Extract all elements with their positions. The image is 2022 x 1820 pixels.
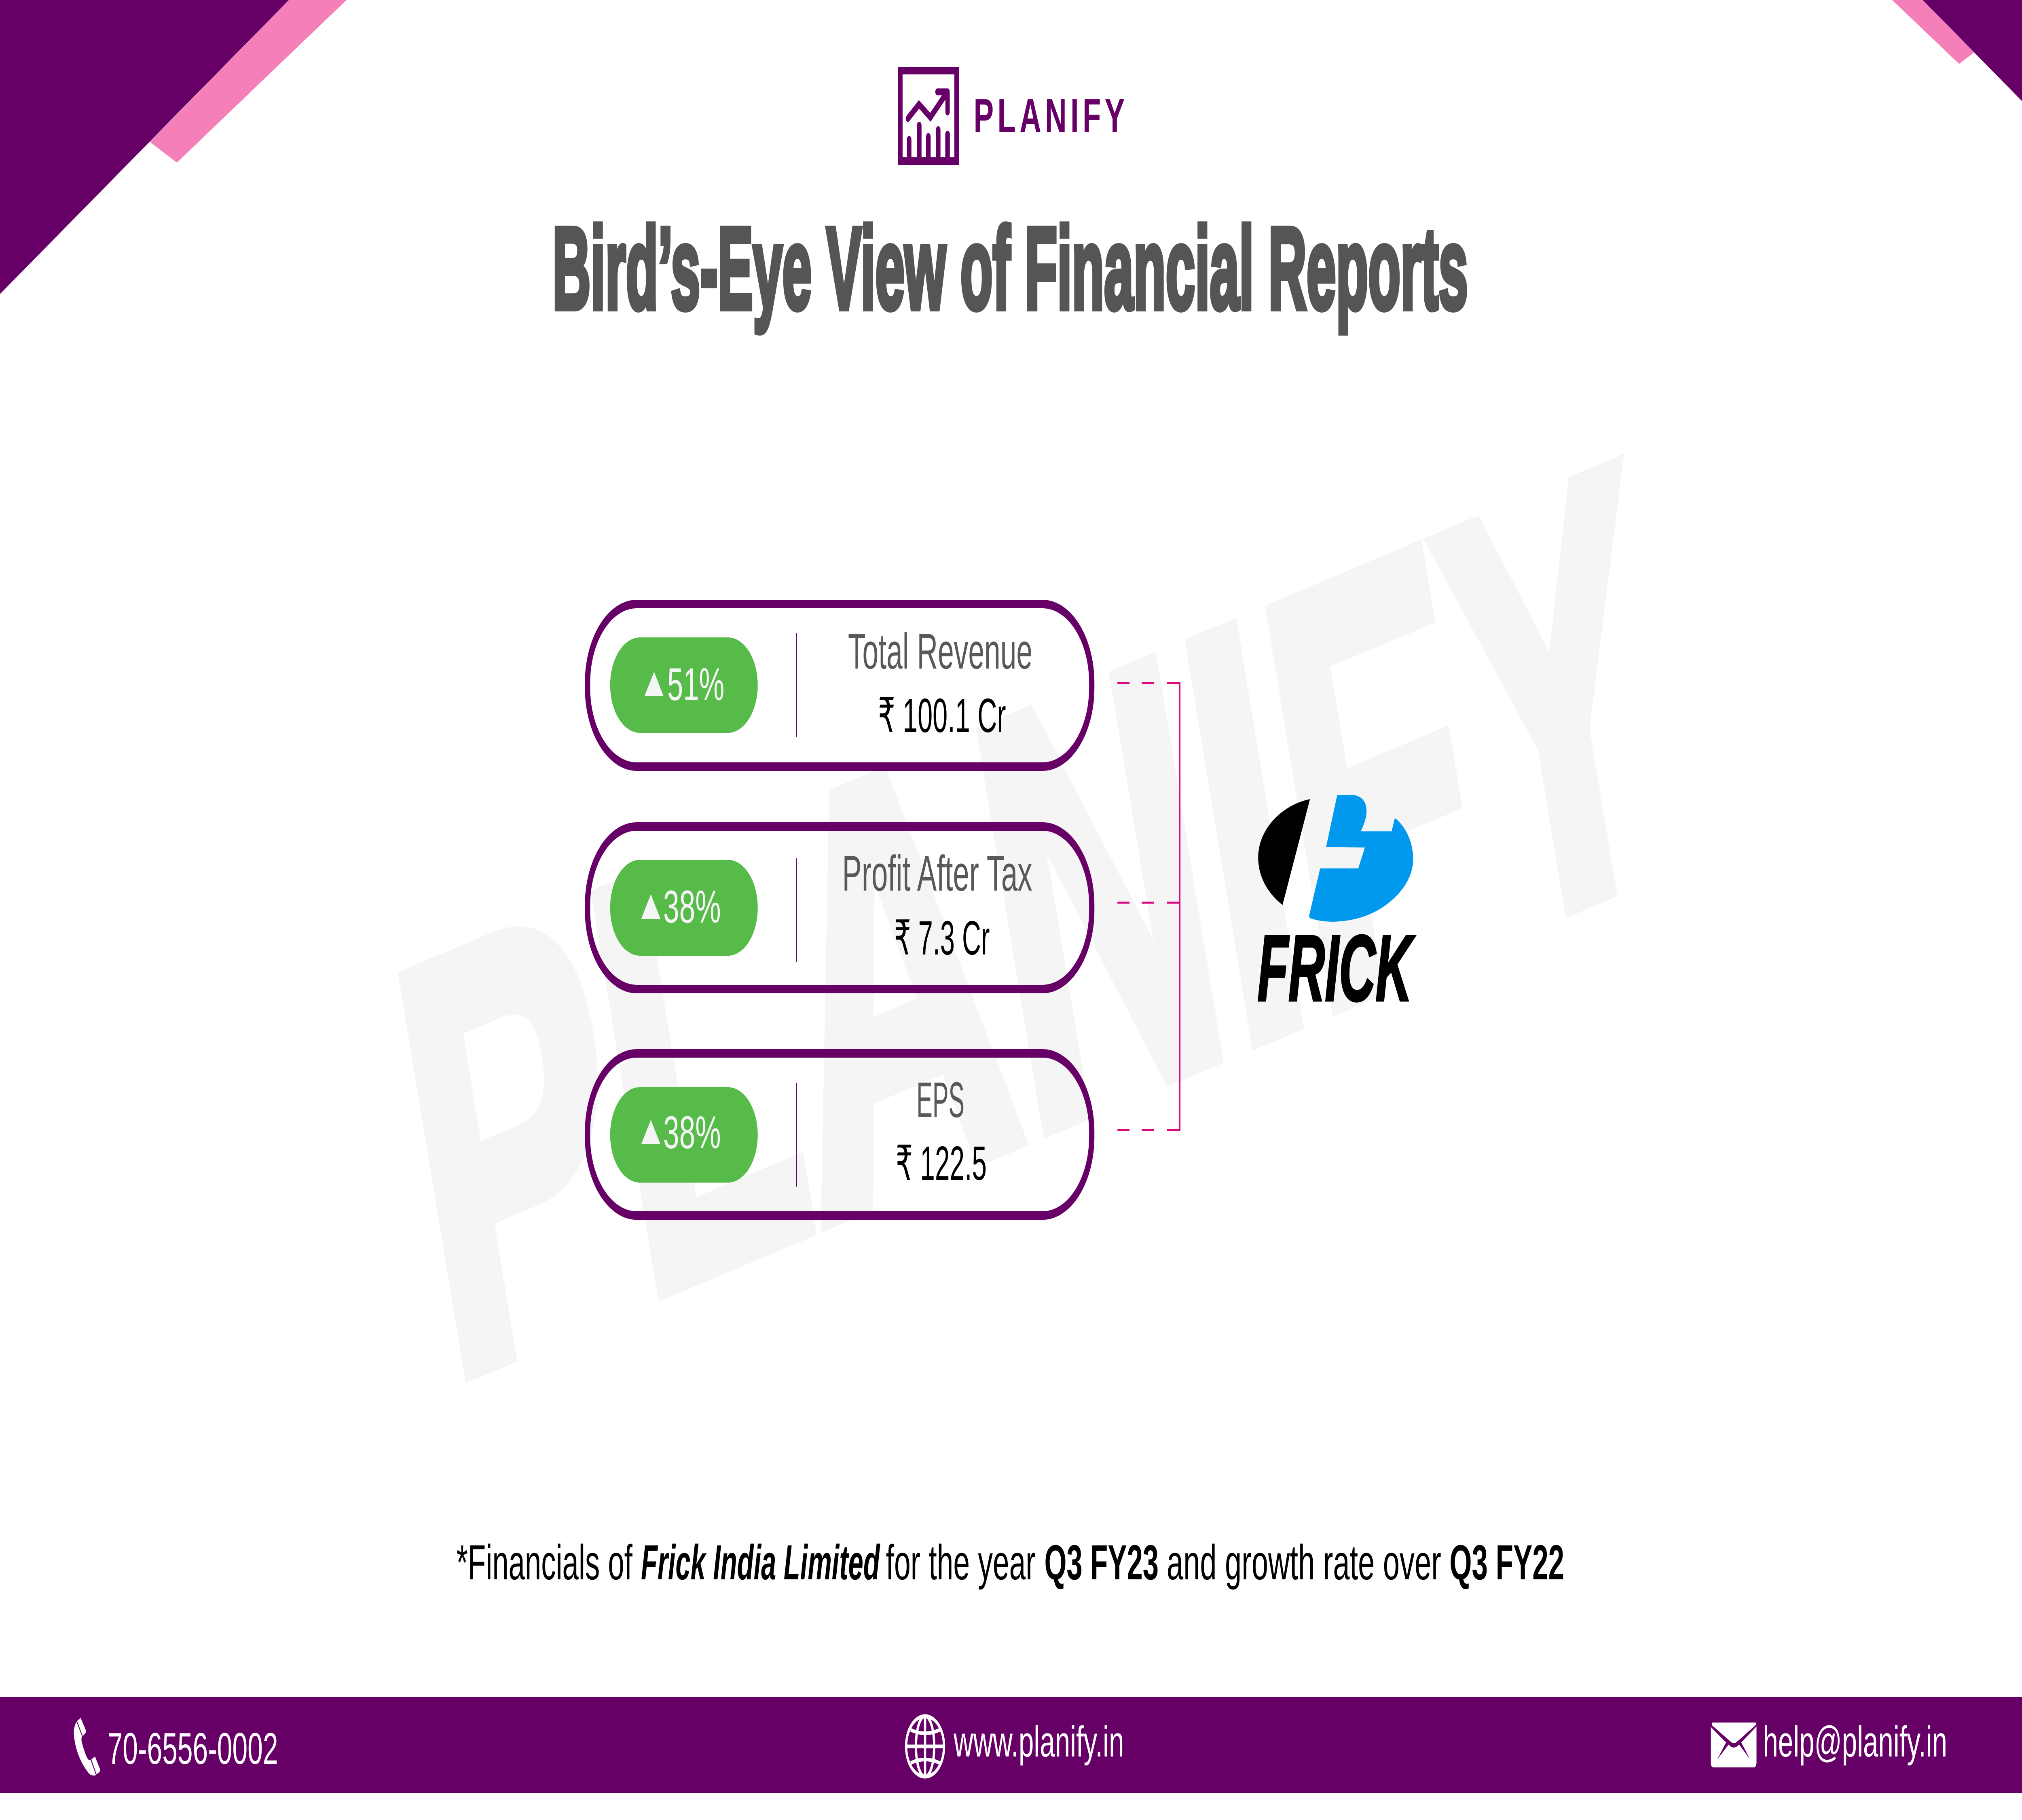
label: Profit After Tax <box>842 846 1032 902</box>
footnote: and growth rate over <box>1167 1535 1441 1590</box>
growth badge: 51%: 51% <box>667 659 724 710</box>
brand logo <box>898 67 1125 165</box>
footnote: *Financials of <box>457 1535 632 1590</box>
growth badge: 38%: 38% <box>663 1107 721 1158</box>
growth badge: 38%: 38% <box>663 881 721 933</box>
label: Total Revenue <box>848 624 1032 679</box>
phone number: 70-6556-0002 <box>108 1724 278 1773</box>
title: Bird’s-Eye View of Financial Reports <box>552 203 1468 334</box>
label: EPS <box>916 1072 964 1128</box>
footnote: Q3 FY23 <box>1044 1535 1159 1590</box>
footnote <box>457 1535 1564 1590</box>
icon: Frick emblem <box>1258 795 1413 922</box>
company name: FRICK <box>1257 916 1415 1021</box>
icon: chart logo <box>898 67 959 165</box>
website: www.planify.in <box>953 1717 1124 1766</box>
top-left corner decoration <box>0 0 347 294</box>
growth badge: 51% <box>610 637 758 733</box>
growth badge: 38% <box>610 860 758 956</box>
footer bar <box>0 1697 2022 1793</box>
email: help@planify.in <box>1763 1717 1947 1766</box>
panel: total revenue <box>588 604 1092 767</box>
company logo: Frick <box>1257 795 1415 1021</box>
value: ₹ 100.1 Cr <box>878 689 1006 743</box>
footnote: for the year <box>886 1535 1036 1590</box>
icon: envelope <box>1711 1723 1757 1767</box>
panel: profit after tax <box>588 827 1092 989</box>
panel: EPS <box>588 1053 1092 1216</box>
brand name: PLANIFY <box>974 89 1125 143</box>
growth badge: 38% <box>610 1087 758 1183</box>
value: ₹ 7.3 Cr <box>894 911 990 965</box>
icon: globe <box>906 1716 944 1777</box>
dashed bracket connector <box>1117 682 1180 1131</box>
icon: phone <box>74 1718 100 1776</box>
footnote: Q3 FY22 <box>1449 1535 1564 1590</box>
footnote: Frick India Limited <box>641 1535 880 1590</box>
top-right corner decoration <box>1892 0 2022 101</box>
value: ₹ 122.5 <box>896 1136 987 1190</box>
watermark: PLANIFY <box>365 342 1706 1500</box>
